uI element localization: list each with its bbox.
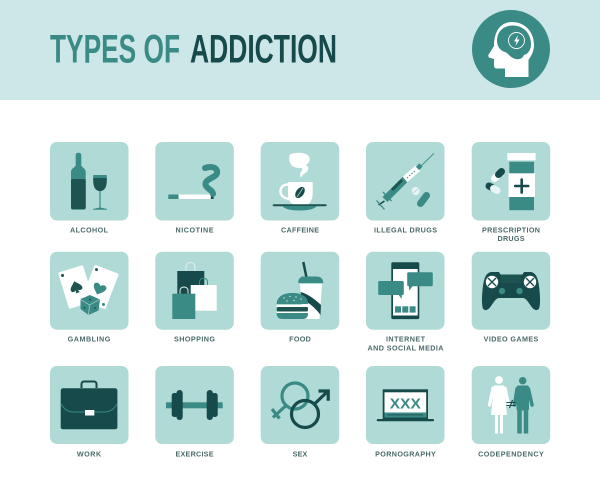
panel: pornography <box>366 366 444 458</box>
icon: coffee cup with steam <box>273 153 327 210</box>
label: caffeine: CAFFEINE <box>281 226 319 234</box>
icon: gender symbols <box>272 383 328 428</box>
label: gambling: GAMBLING <box>68 335 111 344</box>
label: prescription drugs: DRUGS <box>498 234 525 243</box>
title: ADDICTION <box>190 28 337 72</box>
icon: wine bottle and glass <box>71 153 107 210</box>
icon: pill bottle and capsules <box>489 153 536 210</box>
icon: smartphone with speech bubbles <box>378 262 433 319</box>
icon: dumbbell <box>166 390 223 420</box>
icon: shopping bags <box>172 262 217 319</box>
panel: prescription drugs <box>472 142 550 243</box>
panel: sex <box>261 366 339 458</box>
label: internet and social media: AND SOCIAL MEDIA <box>368 344 444 352</box>
panel: shopping <box>155 252 234 344</box>
panel: video games <box>472 252 550 344</box>
title: TYPES OF <box>50 28 180 72</box>
panel: internet and social media <box>366 252 444 352</box>
panel: caffeine <box>261 142 339 234</box>
icon: briefcase <box>61 382 117 429</box>
panel: exercise <box>155 366 234 458</box>
panel: gambling <box>50 252 128 344</box>
label: prescription drugs <box>482 226 540 243</box>
label: sex: SEX <box>293 450 308 458</box>
label: prescription drugs: PRESCRIPTION <box>482 226 540 234</box>
title <box>50 28 337 72</box>
panel: codependency <box>472 366 550 458</box>
icon: syringe and pills <box>376 153 434 210</box>
label: internet and social media: INTERNET <box>386 335 426 344</box>
label: nicotine: NICOTINE <box>176 226 214 234</box>
icon: laptop with xxx: XXX <box>390 395 421 412</box>
icon: game controller <box>482 272 540 310</box>
label: internet and social media <box>368 335 444 352</box>
label: video games: VIDEO GAMES <box>484 335 539 344</box>
label: work: WORK <box>77 450 102 458</box>
label: food: FOOD <box>289 335 311 344</box>
label: codependency: CODEPENDENCY <box>478 450 544 458</box>
icon: head with brain <box>472 10 550 88</box>
icon: playing cards and die <box>58 265 119 315</box>
panel: nicotine <box>155 142 234 234</box>
icon: burger and drink <box>277 262 323 319</box>
icon: cigarette with smoke <box>168 167 217 199</box>
label: shopping: SHOPPING <box>174 335 215 344</box>
panel: work <box>50 366 128 458</box>
panel: illegal drugs <box>366 142 444 234</box>
icon: codependent couple <box>490 376 532 434</box>
label: alcohol: ALCOHOL <box>70 226 109 234</box>
label: pornography: PORNOGRAPHY <box>375 450 436 458</box>
label: exercise: EXERCISE <box>176 450 214 458</box>
panel: food <box>261 252 339 344</box>
label: illegal drugs: ILLEGAL DRUGS <box>374 226 437 234</box>
header band <box>0 0 600 100</box>
panel: alcohol <box>50 142 128 234</box>
